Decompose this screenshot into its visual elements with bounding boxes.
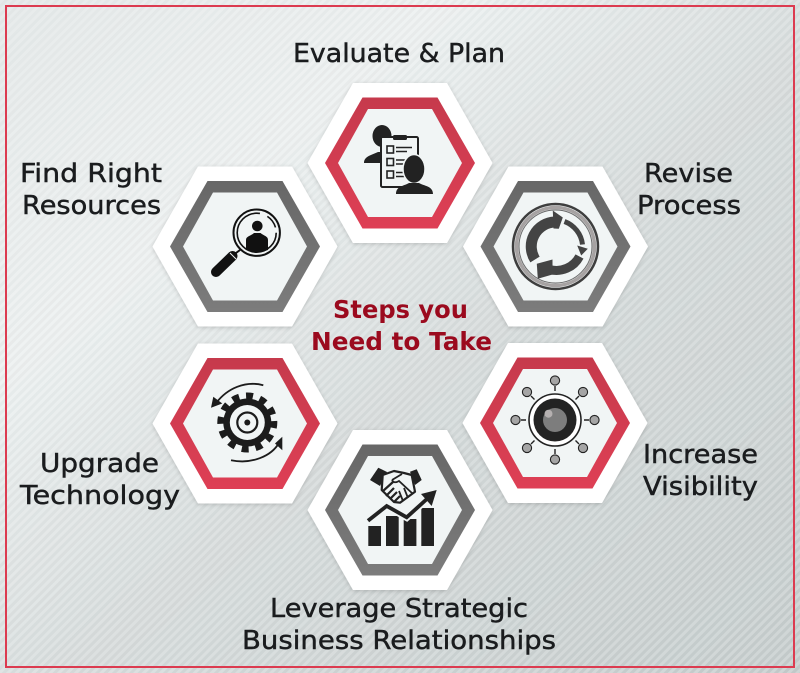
heading: find right resources: Find Right: [20, 159, 162, 189]
heading: find right resources: Resources: [22, 191, 161, 221]
heading: upgrade technology: Upgrade: [40, 449, 159, 479]
heading: revise process: Revise: [644, 159, 733, 189]
heading: upgrade technology: [19, 449, 180, 511]
heading: find right resources: [20, 159, 162, 221]
panel: upgrade technology hexagon: [152, 344, 338, 504]
heading: leverage strategic business relationships: Leverage Strategic: [270, 594, 528, 624]
panel: leverage strategic business relationships hexagon: [308, 430, 492, 590]
icon: handshake and rising bar chart: [368, 468, 437, 546]
title: steps you need to take: Steps you: [333, 295, 468, 324]
title: steps you need to take: Need to Take: [311, 327, 492, 356]
heading: increase visibility: [643, 440, 758, 502]
heading: increase visibility: Increase: [643, 440, 758, 470]
panel: revise process hexagon: [463, 166, 648, 326]
heading: revise process: [637, 159, 741, 221]
heading: leverage strategic business relationships: Business Relationships: [242, 626, 556, 656]
icon: magnifier over person: [216, 210, 280, 272]
heading: increase visibility: Visibility: [643, 472, 758, 502]
icon: gear with rotation arrows: [211, 384, 282, 461]
icon: lens with satellite nodes: [511, 376, 599, 464]
heading: revise process: Process: [637, 191, 741, 221]
panel: evaluate and plan hexagon: [308, 83, 492, 243]
icon: circular arrows in ring: [513, 204, 598, 289]
heading: upgrade technology: Technology: [19, 481, 180, 511]
panel: find right resources hexagon: [152, 166, 338, 326]
title: steps you need to take: [311, 295, 492, 356]
heading: evaluate and plan: Evaluate & Plan: [293, 39, 505, 69]
icon: clipboard with people: [364, 125, 433, 194]
panel: increase visibility hexagon: [462, 343, 648, 503]
heading: leverage strategic business relationships: [242, 594, 556, 656]
